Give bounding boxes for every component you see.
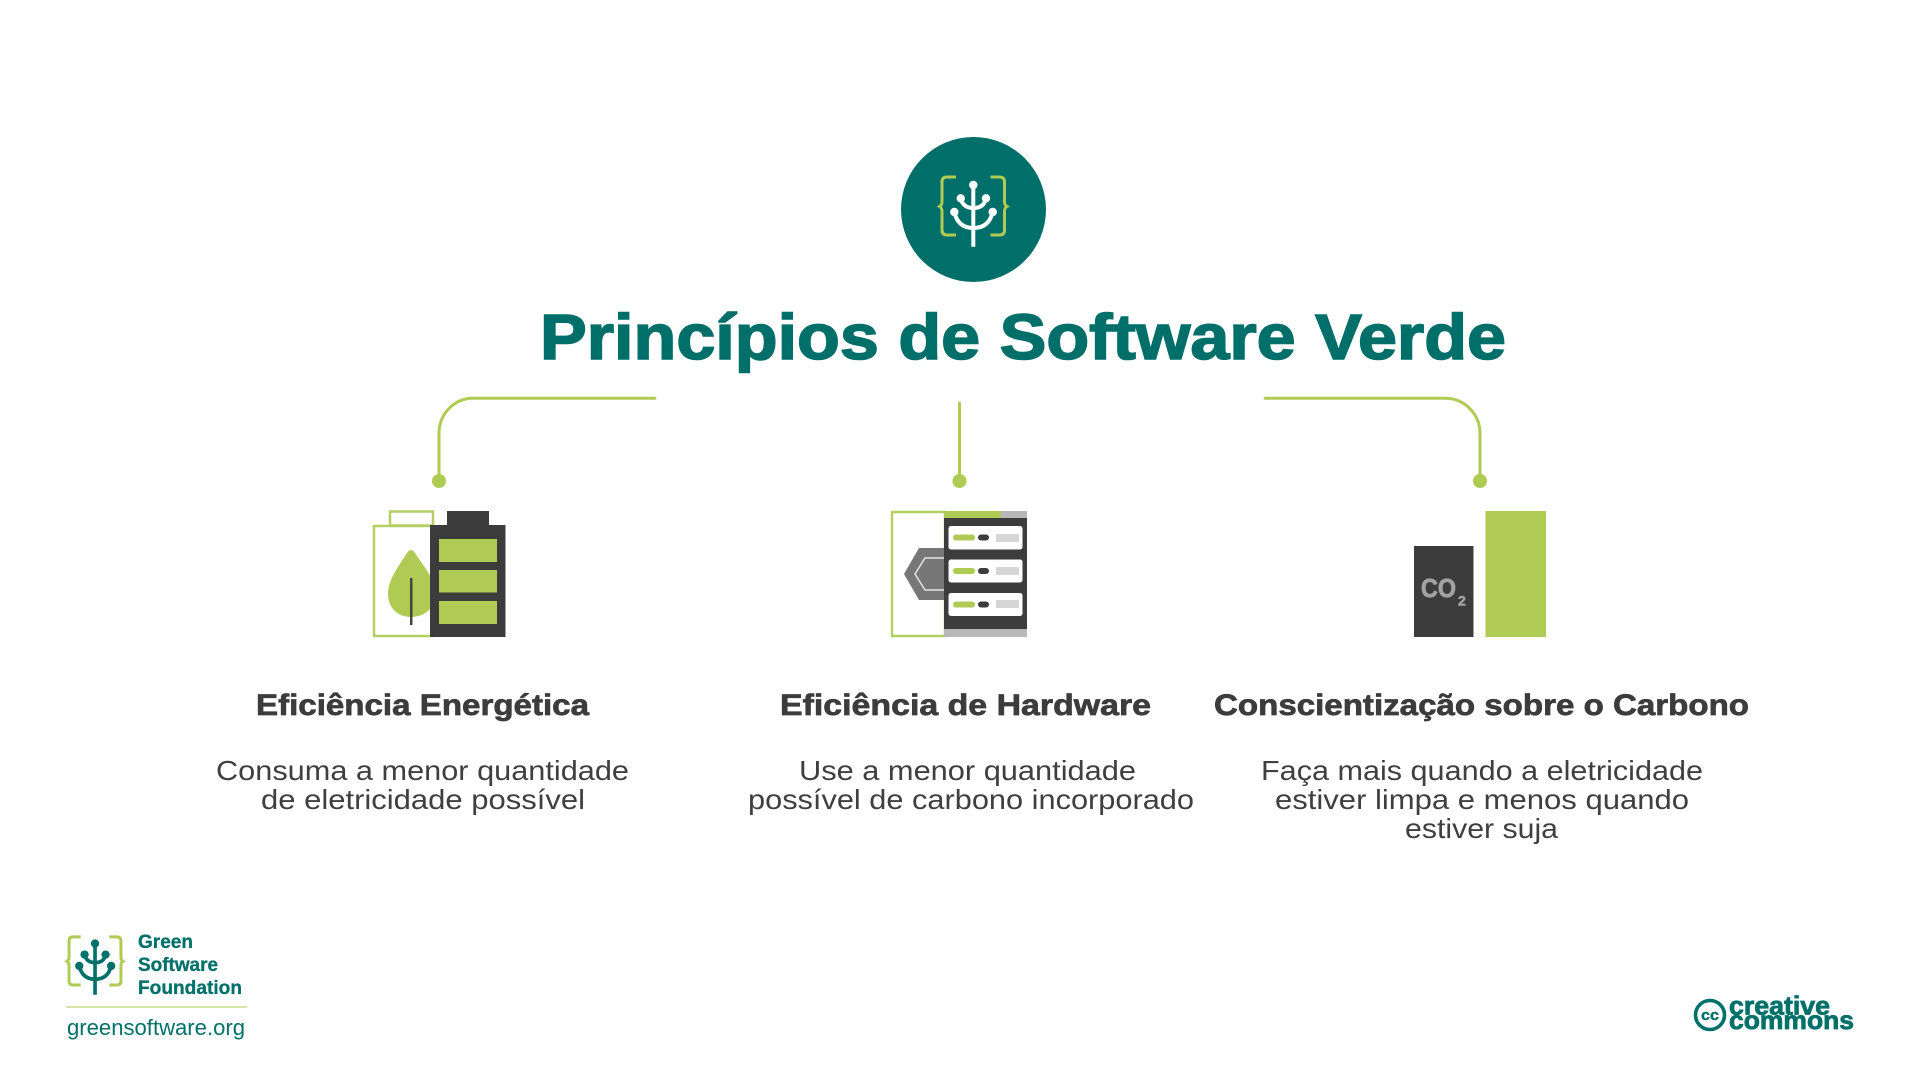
icon: foundation logo badge	[901, 137, 1046, 282]
logo: creative commons: creative	[1729, 990, 1830, 1020]
heading: energy efficiency: Eficiência Energética	[256, 689, 589, 722]
logo wordmark: Foundation	[138, 978, 242, 999]
icon: carbon bars	[1414, 511, 1546, 637]
connector: left	[432, 398, 655, 488]
heading: hardware efficiency: Eficiência de Hardware	[780, 689, 1151, 722]
heading: carbon awareness: Conscientização sobre o Carbono	[1214, 689, 1749, 722]
logo wordmark: Green	[138, 932, 193, 953]
website url: greensoftware.org	[67, 1015, 245, 1040]
logo: Green Software Foundation	[66, 932, 247, 1040]
text: carbon awareness description: Faça mais quando a eletricidade	[1261, 755, 1703, 786]
text: hardware efficiency description: possível de carbono incorporado	[748, 784, 1194, 815]
logo: creative commons	[1696, 990, 1854, 1035]
text: hardware efficiency description: Use a menor quantidade	[799, 755, 1136, 786]
connector: right	[1265, 398, 1487, 488]
icon: server with chip	[892, 511, 1027, 637]
text: energy efficiency description: de eletricidade possível	[261, 784, 585, 815]
icon: foundation mark	[67, 937, 123, 995]
logo: creative commons: cc	[1701, 1007, 1719, 1024]
text: energy efficiency description: Consuma a menor quantidade	[216, 755, 629, 786]
icon: carbon bars: 2	[1458, 592, 1466, 608]
text: carbon awareness description: estiver suja	[1405, 813, 1558, 844]
text: carbon awareness description: estiver limpa e menos quando	[1275, 784, 1689, 815]
logo: creative commons: commons	[1729, 1005, 1854, 1035]
connector: center	[952, 403, 966, 488]
icon: carbon bars: CO	[1421, 573, 1456, 603]
title: Princípios de Software Verde	[540, 301, 1506, 373]
logo wordmark: Software	[138, 955, 218, 976]
icon: battery with leaf	[374, 511, 506, 637]
